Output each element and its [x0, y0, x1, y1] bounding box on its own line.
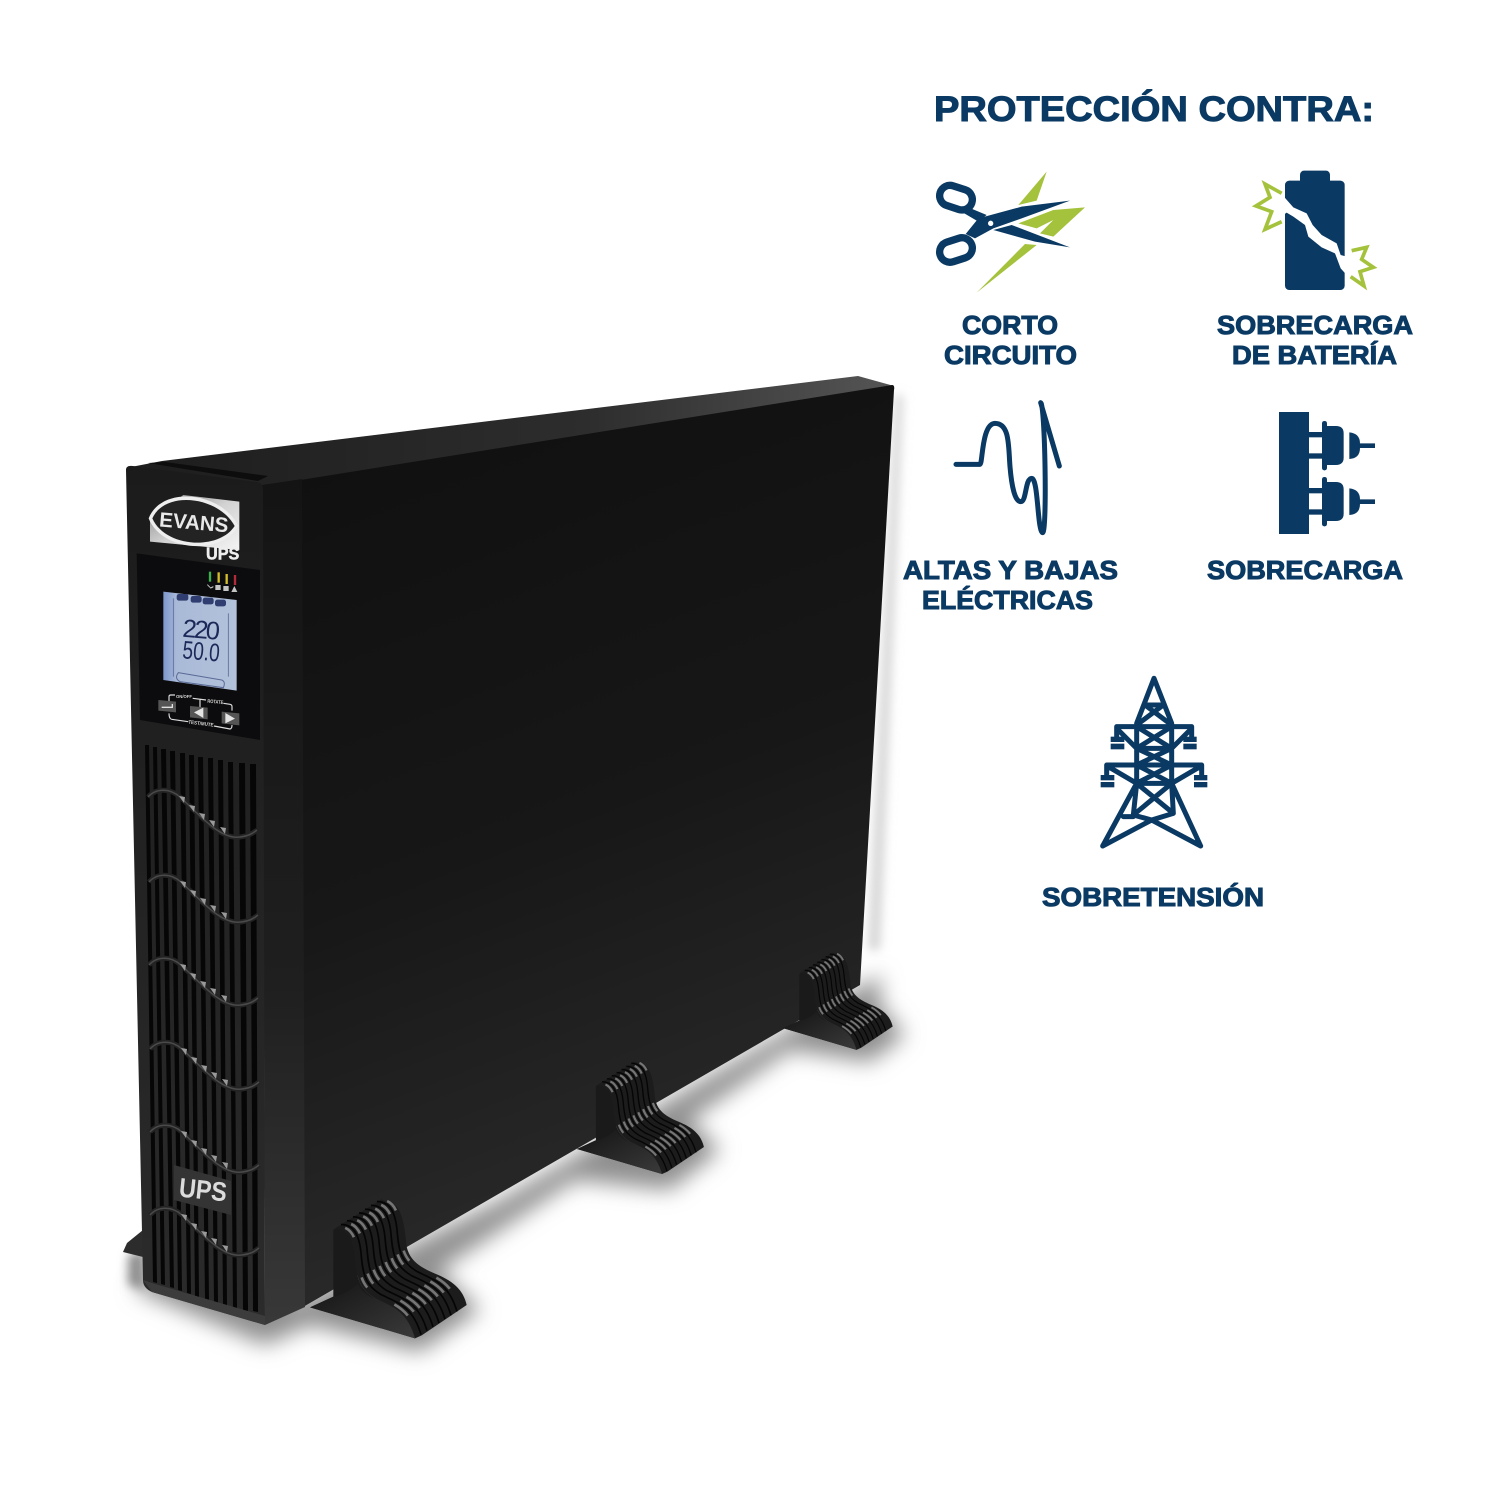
icon: voltage wave — [956, 403, 1059, 533]
side panel — [300, 385, 894, 1307]
UPS unit — [123, 376, 894, 1338]
foot: middle — [577, 1061, 704, 1174]
top face — [126, 376, 894, 486]
drop shadow under the UPS — [128, 395, 905, 1352]
side bevel — [262, 479, 305, 1325]
control buttons: ON/OFF — [176, 694, 192, 700]
control buttons: TEST/MUTE — [188, 720, 214, 729]
rear support tab — [123, 1230, 143, 1257]
LCD display: 220 — [181, 615, 221, 646]
control buttons — [158, 694, 239, 729]
status LEDs — [210, 572, 235, 585]
label: altas y bajas eléctricas — [903, 555, 1118, 615]
UPS badge — [174, 1165, 231, 1215]
icon: broken battery — [1256, 171, 1373, 290]
bottom lip of bezel — [143, 1280, 265, 1325]
label: altas y bajas eléctricas: ELÉCTRICAS — [922, 585, 1093, 615]
label: corto circuito: CORTO — [962, 310, 1058, 340]
logo and control panel — [137, 495, 260, 740]
UPS badge: UPS — [178, 1173, 228, 1207]
label: sobrecarga: SOBRECARGA — [1207, 555, 1403, 585]
top vent slot — [148, 462, 268, 481]
icon: transmission tower — [1101, 678, 1207, 846]
ventilation grille — [145, 745, 259, 1312]
foot: rear — [783, 953, 893, 1050]
logo: EVANS — [149, 495, 239, 563]
logo: EVANS: EVANS — [158, 508, 229, 537]
label: corto circuito — [944, 310, 1077, 370]
icon: overloaded plugs — [1279, 412, 1375, 534]
control buttons: ROTATE — [207, 699, 224, 706]
title: PROTECCIÓN CONTRA: — [934, 89, 1374, 129]
icon: scissors and lightning — [937, 172, 1085, 293]
label: sobrecarga de batería: DE BATERÍA — [1232, 340, 1397, 370]
LCD display: 50.0 — [181, 636, 221, 668]
front bezel — [126, 466, 265, 1325]
LCD display — [163, 592, 237, 691]
display panel — [137, 553, 260, 740]
label: sobrecarga de batería: SOBRECARGA — [1217, 310, 1413, 340]
label: sobretensión: SOBRETENSIÓN — [1042, 882, 1264, 912]
foot: front — [310, 1199, 467, 1338]
label: sobrecarga de batería — [1217, 310, 1413, 370]
logo: EVANS: UPS — [206, 543, 239, 563]
label: altas y bajas eléctricas: ALTAS Y BAJAS — [903, 555, 1118, 585]
label: corto circuito: CIRCUITO — [944, 340, 1077, 370]
